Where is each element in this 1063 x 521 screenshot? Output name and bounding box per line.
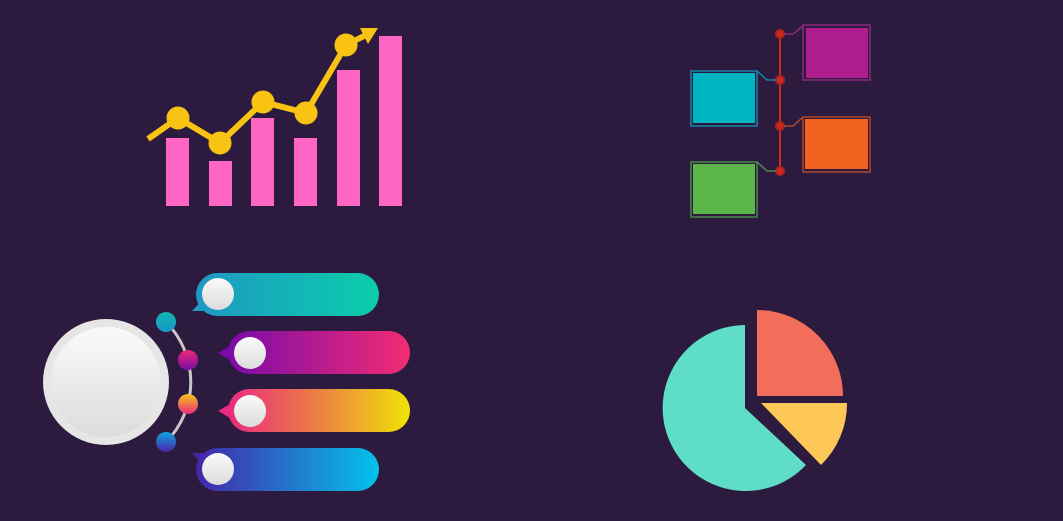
box: magenta [784, 25, 870, 80]
box: orange [784, 117, 870, 172]
trend line with arrow [148, 28, 378, 154]
connector arc [166, 322, 191, 442]
timeline diagram [691, 25, 870, 217]
bars [166, 36, 402, 206]
pill 1 [192, 273, 379, 316]
pie chart [663, 310, 847, 491]
node markers [776, 30, 784, 175]
big circle [43, 319, 169, 445]
box: cyan [691, 71, 776, 126]
chart: bar and line growth [148, 28, 402, 206]
pill 2 [218, 331, 410, 374]
pill 3 [218, 389, 410, 432]
pill 4 [192, 448, 379, 491]
arc dots [156, 312, 198, 452]
box: green [691, 162, 776, 217]
panel: circle with option pills [43, 273, 410, 491]
